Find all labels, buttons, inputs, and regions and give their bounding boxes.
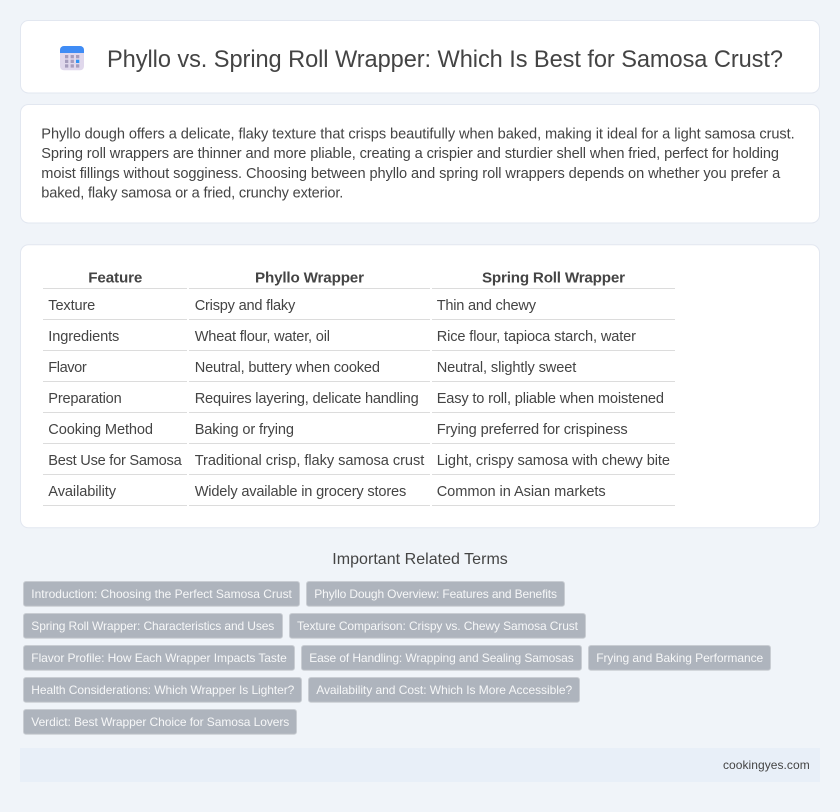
table row: flavor — [48, 360, 576, 376]
table row: texture: Crispy and flaky — [195, 298, 296, 314]
tag — [24, 678, 302, 702]
table row: preparation — [48, 391, 664, 407]
tag — [24, 710, 296, 734]
heading: important related terms: Important Related Terms — [332, 551, 508, 568]
table row: preparation: Easy to roll, pliable when moistened — [437, 391, 664, 407]
tag: Spring Roll Wrapper: Characteristics and Uses — [31, 619, 274, 633]
table row: availability — [48, 484, 606, 500]
table row: texture — [48, 298, 537, 314]
tag: Phyllo Dough Overview: Features and Benefits — [314, 587, 557, 601]
table row: flavor: Neutral, buttery when cooked — [195, 360, 380, 376]
panel: intro paragraph: Phyllo dough offers a delicate, flaky texture that crisps beautifully when baked, making it ideal for a light samosa crust. — [41, 126, 795, 142]
panel: comparison table — [20, 245, 820, 528]
table row: cooking method: Frying preferred for crispiness — [437, 422, 628, 438]
tag — [24, 646, 294, 670]
related term tags — [24, 582, 770, 734]
table row: cooking method: Baking or frying — [195, 422, 294, 438]
table row: preparation: Requires layering, delicate handling — [195, 391, 419, 407]
panel: intro paragraph — [20, 104, 820, 223]
tag — [306, 582, 564, 606]
table header row: Phyllo Wrapper — [255, 270, 364, 287]
table row: best use for samosa: Light, crispy samosa with chewy bite — [437, 453, 670, 469]
table row: best use for samosa — [48, 453, 670, 469]
tag — [290, 614, 586, 638]
table row: cooking method — [48, 422, 628, 438]
panel: intro paragraph: moist fillings without sogginess. Choosing between phyllo and spring roll wrappers depends on whether you prefer a — [41, 166, 781, 182]
table row: best use for samosa: Traditional crisp, flaky samosa crust — [195, 453, 424, 469]
panel: title header — [20, 20, 820, 93]
tag: Health Considerations: Which Wrapper Is Lighter? — [31, 683, 295, 697]
table row: ingredients: Ingredients — [48, 329, 119, 345]
title: Phyllo vs. Spring Roll Wrapper: Which Is Best for Samosa Crust? — [107, 47, 783, 73]
tag: Texture Comparison: Crispy vs. Chewy Samosa Crust — [297, 619, 579, 633]
table row: ingredients — [48, 329, 636, 345]
tag: Introduction: Choosing the Perfect Samosa Crust — [31, 587, 293, 601]
tag — [24, 614, 282, 638]
table row: ingredients: Wheat flour, water, oil — [195, 329, 330, 345]
tag — [24, 582, 300, 606]
tag: Flavor Profile: How Each Wrapper Impacts Taste — [31, 651, 287, 665]
table row: ingredients: Rice flour, tapioca starch, water — [437, 329, 636, 345]
table row: flavor: Neutral, slightly sweet — [437, 360, 576, 376]
table row: availability: Widely available in grocery stores — [195, 484, 406, 500]
panel: intro paragraph: Spring roll wrappers are thinner and more pliable, creating a crispier and sturdier shell when fried, perfect for holding — [41, 146, 779, 162]
tag: Ease of Handling: Wrapping and Sealing Samosas — [309, 651, 574, 665]
footer bar — [20, 748, 820, 782]
table row: availability: Availability — [48, 484, 117, 500]
table row: texture: Texture — [48, 298, 95, 314]
tag — [588, 646, 770, 670]
tag — [308, 678, 580, 702]
table header row: Feature — [88, 270, 142, 287]
table row: texture: Thin and chewy — [437, 298, 537, 314]
tag: Verdict: Best Wrapper Choice for Samosa Lovers — [31, 715, 289, 729]
footer source: cookingyes.com — [723, 758, 810, 772]
tag — [302, 646, 582, 670]
panel: intro paragraph: baked, flaky samosa or a fried, crunchy exterior. — [41, 185, 343, 201]
table row: preparation: Preparation — [48, 391, 122, 407]
table row: cooking method: Cooking Method — [48, 422, 153, 438]
table row: best use for samosa: Best Use for Samosa — [48, 453, 183, 469]
table header row — [88, 270, 625, 287]
table header row: Spring Roll Wrapper — [482, 270, 625, 287]
icon: calendar — [60, 46, 84, 70]
table row: flavor: Flavor — [48, 360, 87, 376]
tag: Availability and Cost: Which Is More Accessible? — [316, 683, 573, 697]
table row: availability: Common in Asian markets — [437, 484, 606, 500]
tag: Frying and Baking Performance — [596, 651, 764, 665]
